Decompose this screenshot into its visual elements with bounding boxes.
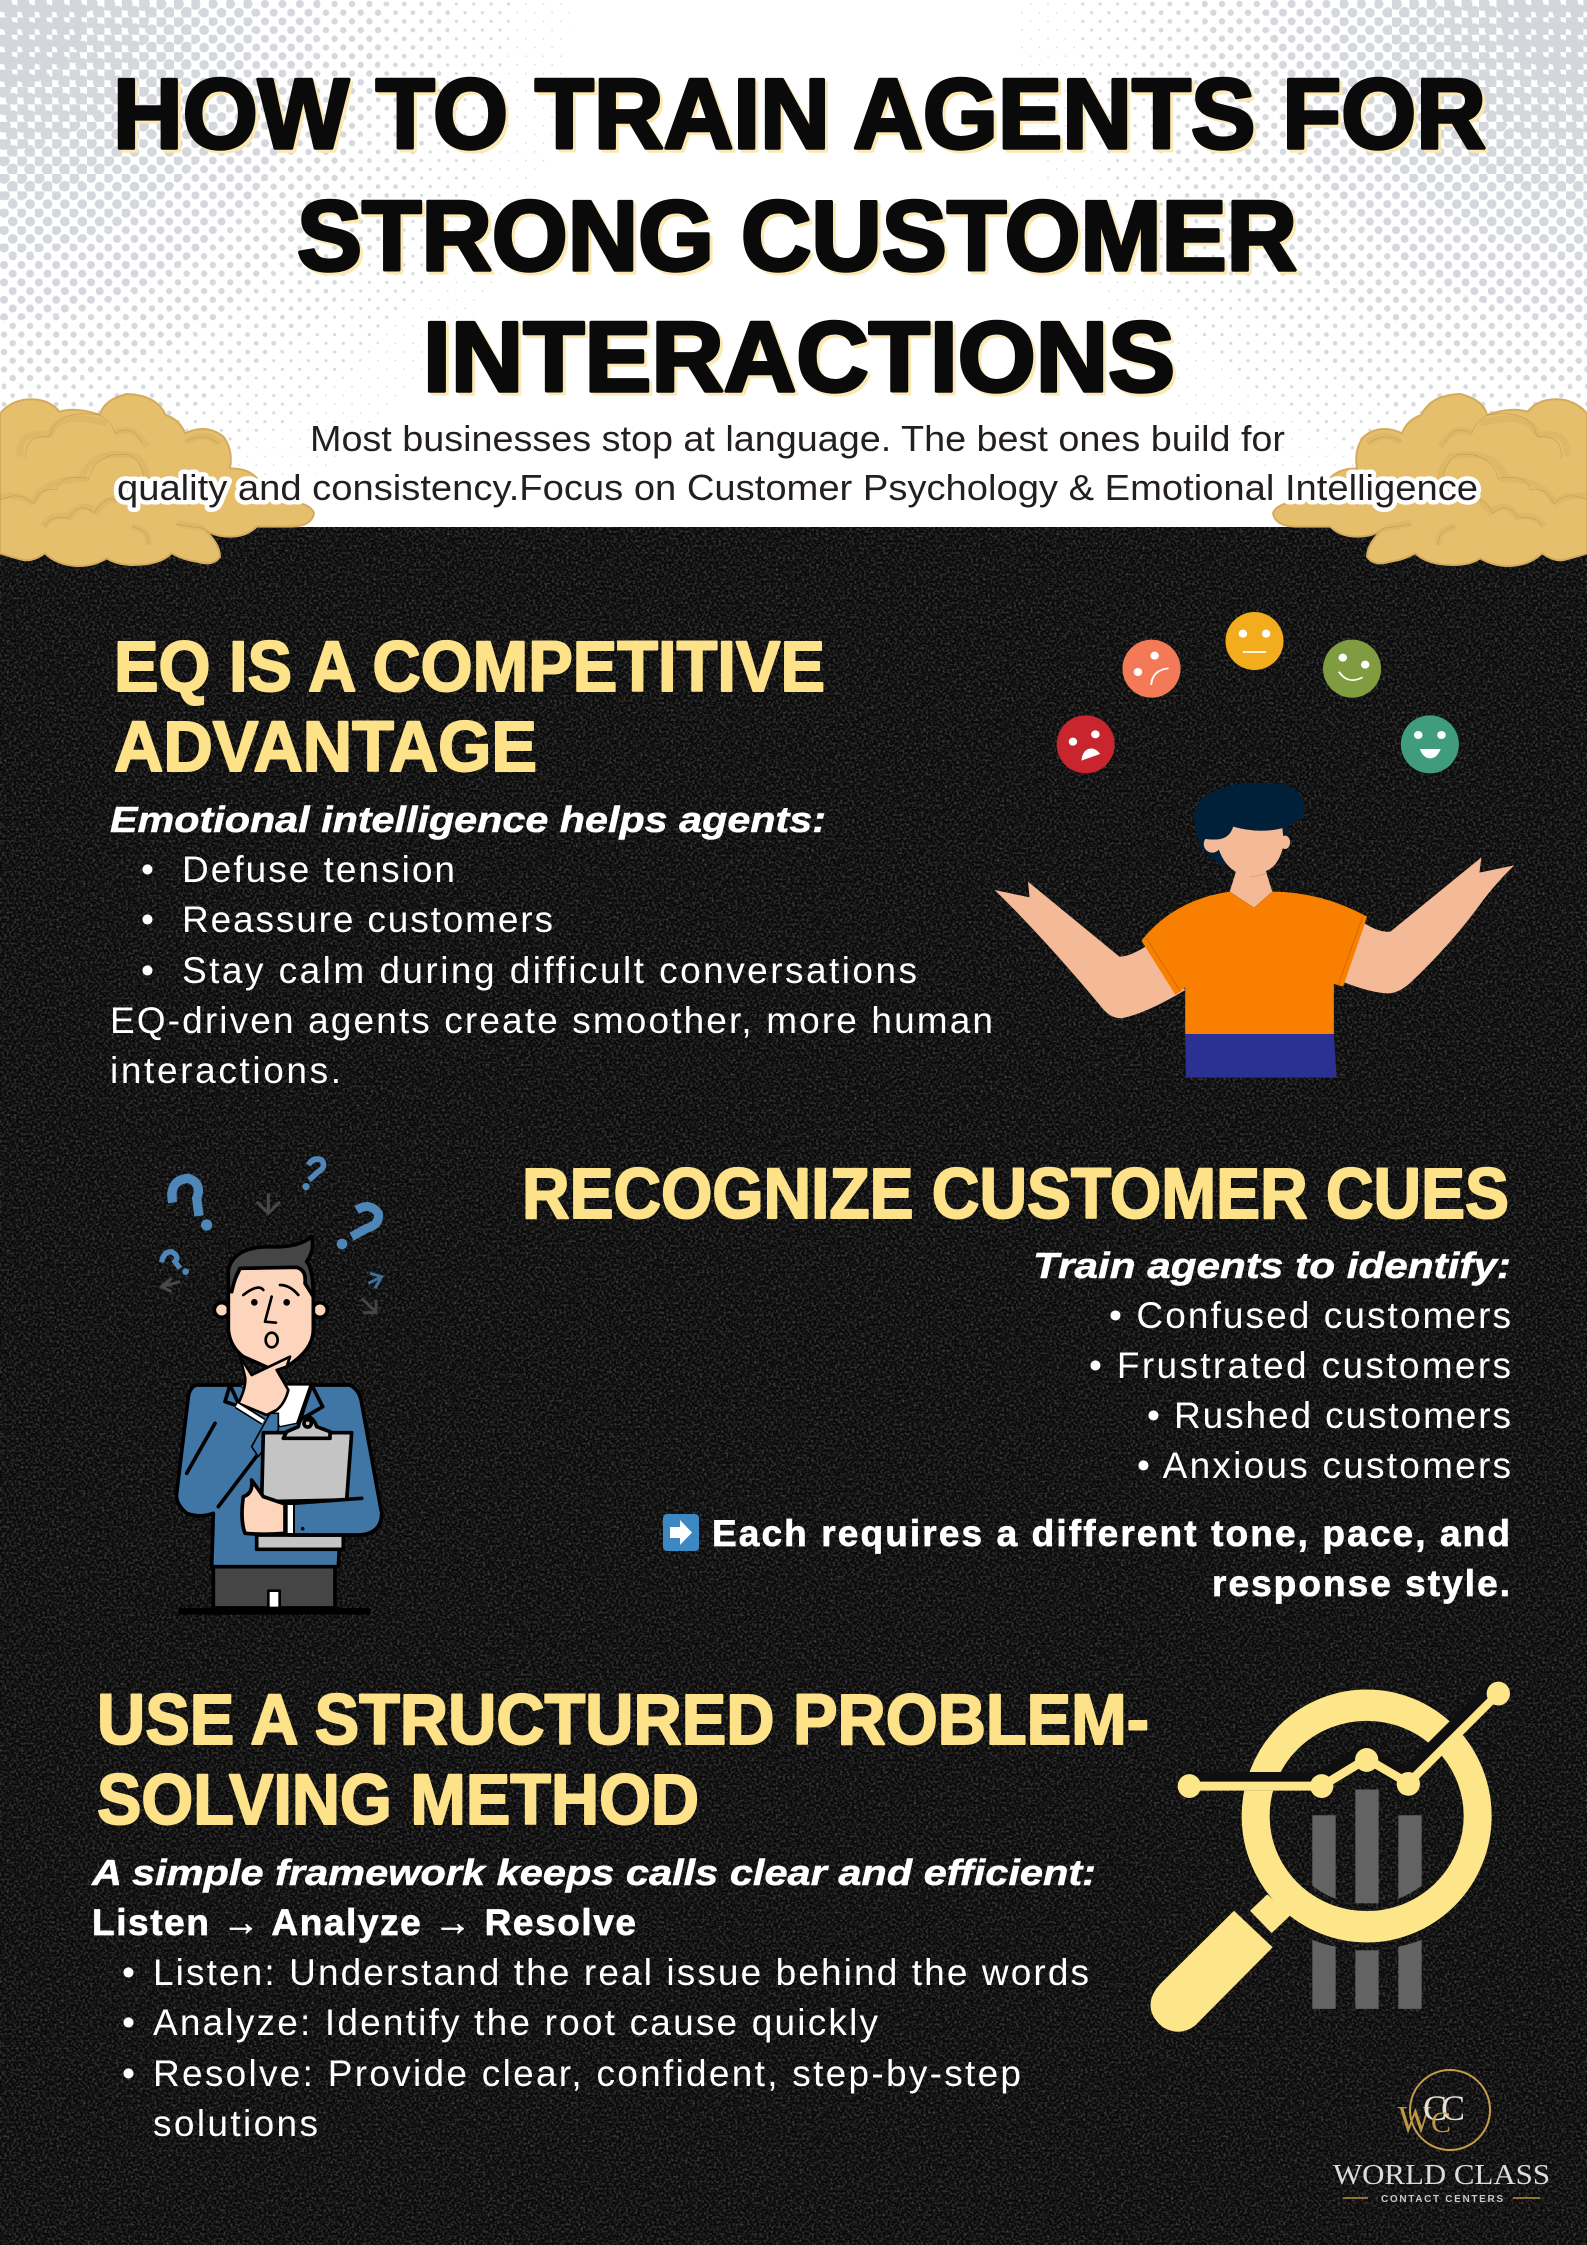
title <box>113 58 1486 412</box>
halftone dots: top left corner <box>0 0 570 570</box>
lens and handle <box>1151 1705 1478 2032</box>
icon: sad face <box>1122 640 1181 698</box>
logo wordmark: WORLD CLASS <box>1333 2159 1550 2191</box>
text block: EQ body: EQ-driven agents create smoother, more human <box>110 1000 993 1041</box>
logo tagline: CONTACT CENTERS <box>1381 2194 1503 2205</box>
icon: happy face <box>1401 715 1459 773</box>
text block: EQ body: • <box>141 950 154 991</box>
text block: EQ body: Defuse tension <box>182 849 455 890</box>
text block: EQ body: Reassure customers <box>182 899 553 940</box>
heading: EQ: ADVANTAGE <box>114 708 537 787</box>
icon: smiling face <box>1323 640 1381 698</box>
halftone dots: top right corner <box>1017 0 1587 570</box>
text block: EQ body: Stay calm during difficult conversations <box>182 950 917 991</box>
text block: EQ body: • <box>141 849 154 890</box>
bar chart <box>1312 1789 1422 2009</box>
logo monogram: C <box>1431 2106 1451 2139</box>
heading: EQ: EQ IS A COMPETITIVE <box>114 628 825 707</box>
page background: white header <box>0 0 1587 530</box>
logo monogram <box>1398 2088 1465 2141</box>
trend line <box>1178 1682 1510 1798</box>
icon: small arrows <box>162 1193 382 1313</box>
logo monogram: W <box>1398 2099 1431 2141</box>
text block: EQ body: interactions. <box>110 1050 341 1091</box>
icon: left cloud <box>0 394 314 566</box>
text block: callout: response style. <box>1212 1563 1510 1604</box>
panel: structured problem-solving method <box>91 1681 1510 2144</box>
subtitle: quality and consistency.Focus on Customer Psychology & Emotional Intelligence <box>117 467 1478 508</box>
icon: magnifying glass over chart <box>1151 1682 1510 2032</box>
text block: method body <box>91 1852 1096 2144</box>
text block: method body: Resolve: Provide clear, confident, step-by-step <box>153 2053 1021 2094</box>
logo monogram: C <box>1423 2088 1447 2128</box>
icon: blue arrow emoji <box>663 1514 699 1551</box>
title: STRONG CUSTOMER <box>297 180 1297 291</box>
heading: EQ <box>114 628 825 787</box>
text block: method body: • <box>122 1952 135 1993</box>
icon: angry face <box>1057 715 1115 773</box>
title: INTERACTIONS <box>423 301 1175 412</box>
text block: method body: Listen → Analyze → Resolve <box>92 1902 636 1943</box>
text block: EQ body <box>110 799 993 1091</box>
heading: method: USE A STRUCTURED PROBLEM- <box>97 1681 1149 1760</box>
panel: recognize customer cues <box>162 1155 1511 1615</box>
panel: EQ is a competitive advantage <box>110 612 1514 1091</box>
text block: cues list: • Rushed customers <box>1147 1395 1511 1436</box>
illustration: person <box>995 783 1514 1078</box>
text block: callout <box>712 1513 1510 1604</box>
text block: method body: A simple framework keeps calls clear and efficient: <box>91 1852 1096 1893</box>
text block: cues list <box>1033 1245 1511 1486</box>
text block: method body: Analyze: Identify the root cause quickly <box>153 2002 878 2043</box>
logo monogram: C <box>1441 2088 1465 2128</box>
logo ring <box>1410 2070 1490 2150</box>
illustration: confused man with clipboard <box>162 1159 382 1615</box>
text block: cues list: • Anxious customers <box>1137 1445 1511 1486</box>
icon: neutral face <box>1225 612 1284 670</box>
illustration: person juggling emotion faces <box>995 612 1514 1078</box>
text block: method body: solutions <box>153 2103 318 2144</box>
text block: callout: Each requires a different tone, pace, and <box>712 1513 1510 1554</box>
heading: method <box>97 1681 1149 1840</box>
figure <box>176 1237 382 1615</box>
heading: cues: RECOGNIZE CUSTOMER CUES <box>522 1155 1509 1234</box>
icon: right cloud <box>1273 394 1587 566</box>
subtitle <box>117 418 1478 508</box>
subtitle: Most businesses stop at language. The best ones build for <box>310 418 1285 459</box>
icon: question marks <box>162 1159 379 1275</box>
text block: method body: • <box>122 2053 135 2094</box>
text block: EQ body: Emotional intelligence helps agents: <box>110 799 826 840</box>
text block: method body: • <box>122 2002 135 2043</box>
text block: cues list: • Frustrated customers <box>1089 1345 1511 1386</box>
text block: cues list: Train agents to identify: <box>1033 1245 1511 1286</box>
logo: World Class Contact Centers <box>1333 2070 1550 2205</box>
heading: method: SOLVING METHOD <box>97 1761 699 1840</box>
text block: EQ body: • <box>141 899 154 940</box>
dark textured panel <box>0 527 1587 2245</box>
text block: method body: Listen: Understand the real issue behind the words <box>153 1952 1089 1993</box>
title: HOW TO TRAIN AGENTS FOR <box>113 58 1486 169</box>
text block: cues list: • Confused customers <box>1109 1295 1511 1336</box>
